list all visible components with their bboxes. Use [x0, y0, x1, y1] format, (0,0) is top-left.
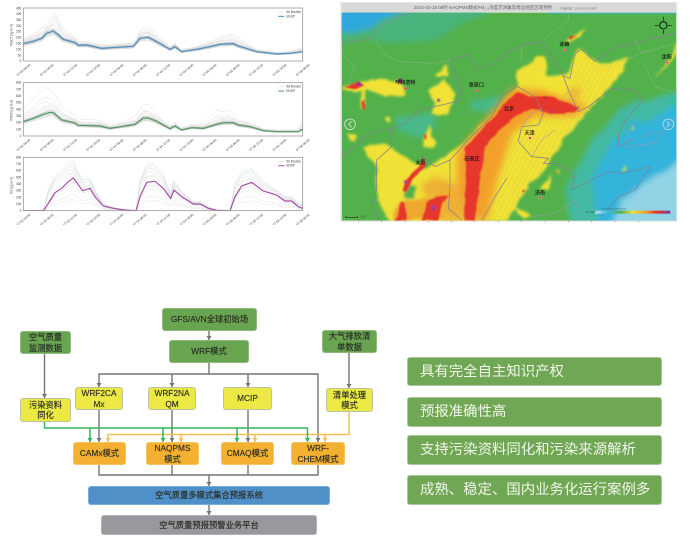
chart: PM2.5: 07-03 00:00	[16, 63, 31, 77]
scale bar: 1:1.8	[360, 217, 366, 219]
flow: global field: GFS/AVN全球初始场	[171, 314, 248, 324]
chart: PM2.5: 150	[16, 42, 22, 46]
chart: PM2.5: 50	[18, 53, 22, 57]
city labels: 呼和浩特	[395, 79, 415, 86]
legend: O3: 58 Models	[286, 159, 301, 163]
chart: O3: 100	[16, 202, 22, 206]
flow: WRF2NAQM: WRF2NA	[154, 388, 190, 398]
flow: NAQPMS: NAQPMS	[155, 443, 190, 453]
chart: PM10: 07-05 12:00	[248, 138, 264, 152]
compass	[655, 17, 672, 34]
chart: PM2.5: PM2.5 [ug m-3]	[10, 24, 14, 46]
flow: assimilation: 同化	[37, 410, 54, 420]
city labels: 北京	[504, 106, 514, 113]
flow: emission data: 单数据	[337, 342, 362, 352]
chart: PM10: 400	[16, 107, 22, 111]
chart: PM10: PM10 [ug m-3]	[10, 100, 14, 121]
chart: PM10: 700	[16, 87, 22, 91]
flow: global field	[162, 308, 257, 331]
chart: PM10: 100	[16, 127, 22, 131]
chart: PM10: 07-03 18:00	[85, 138, 101, 152]
flow: WRF2CAMx: WRF2CA	[81, 388, 117, 398]
map ticks	[358, 221, 638, 222]
flow: emission processing: 清单处理	[333, 390, 366, 400]
chart: PM2.5: 200	[16, 36, 22, 40]
chart: PM10: 07-03 00:00	[16, 138, 31, 152]
green assimilation connectors	[44, 422, 310, 442]
chart: O3	[10, 155, 311, 227]
chart: O3: 0	[20, 209, 22, 213]
chart: PM2.5: 350	[16, 18, 22, 22]
flow: platform: 空气质量预报预警业务平台	[159, 520, 259, 530]
feature: accuracy: 预报准确性高	[420, 404, 506, 420]
colour bar legend: PM₂.₅(μg/m³)	[586, 211, 598, 214]
flow: WRF-CHEM: CHEM模式	[297, 454, 339, 464]
legend: PM2.5: ENSP	[286, 14, 295, 18]
legend: PM10	[278, 85, 301, 93]
chart: PM10: 300	[16, 114, 22, 118]
legend: O3	[278, 159, 301, 168]
chart: O3: 500	[16, 175, 22, 179]
chart: PM2.5: 400	[16, 12, 22, 16]
city labels: 天津	[525, 129, 535, 136]
city labels	[395, 41, 672, 199]
chart: PM2.5: 07-05 00:00	[202, 63, 217, 77]
chart: PM10: 07-05 06:00	[225, 138, 241, 152]
chart: PM2.5: 07-05 06:00	[225, 63, 241, 77]
flow: emission data: 大气排放清	[329, 331, 370, 341]
chart: PM2.5: 250	[16, 30, 22, 34]
chart: PM2.5: 07-05 12:00	[248, 63, 264, 77]
city labels: 石家庄	[464, 155, 480, 162]
flow: WRF2CAMx: Mx	[93, 398, 105, 408]
map title bar	[342, 3, 676, 13]
chart: PM2.5: 07-03 12:00	[62, 63, 78, 77]
chart: PM10: 600	[16, 94, 22, 98]
flow: assimilation: 污染资料	[29, 400, 62, 410]
chart: PM2.5	[10, 6, 311, 77]
chart: PM10	[10, 81, 311, 152]
flow: WRF2NAQM	[148, 387, 196, 410]
chart: PM2.5: 0	[20, 59, 22, 63]
map title bar: 2016-03-16 08时 NAQPMS模式PM₂.₅浓度京津冀及周边地区区域预势	[414, 4, 553, 11]
chart: PM10: 07-06 00:00	[295, 138, 311, 152]
city labels: 沈阳	[662, 53, 672, 60]
colour bar legend	[586, 209, 670, 214]
flow: monitoring data: 监测数据	[29, 342, 62, 352]
feature: IP: 具有完全自主知识产权	[420, 364, 564, 380]
time series charts	[10, 6, 311, 225]
feature: accuracy	[407, 397, 662, 427]
flow: emission data	[322, 330, 377, 353]
flow: CAMx	[73, 442, 126, 465]
chart: PM2.5: 300	[16, 24, 22, 28]
map panel	[340, 2, 678, 222]
flow: monitoring data	[20, 331, 71, 354]
chart: PM10: 07-04 12:00	[155, 138, 171, 152]
legend: O3: ENSP	[286, 164, 295, 168]
orange emission connectors	[106, 412, 349, 442]
flow: WRF-CHEM: WRF-	[307, 443, 329, 453]
flow: CMAQ: CMAQ模式	[227, 448, 268, 458]
flow: platform	[101, 515, 317, 535]
chart: PM2.5: 07-04 06:00	[132, 63, 148, 77]
flow: CMAQ	[221, 442, 274, 465]
feature: IP	[407, 357, 662, 386]
chart: PM10: 07-05 18:00	[272, 138, 287, 152]
chart: PM10: 07-04 00:00	[109, 138, 124, 152]
feature: assimilation: 支持污染资料同化和污染来源解析	[420, 442, 636, 458]
colour bar legend: 35 75 115 150 250 350 500	[602, 209, 627, 211]
chart: PM10: 800	[16, 81, 22, 85]
flow: WRF2NAQM: QM	[165, 398, 179, 408]
flow: ensemble system	[88, 486, 330, 505]
chart: PM10: 500	[16, 101, 22, 105]
flow: monitoring data: 空气质量	[29, 332, 62, 342]
legend: PM10: ENSP	[286, 89, 295, 93]
chart: PM10: 07-04 06:00	[132, 138, 148, 152]
map title bar: （产品时间：2016-03-15 20时）	[558, 7, 599, 11]
chart: O3: 300	[16, 189, 22, 193]
chart: PM10: 07-04 18:00	[179, 138, 194, 152]
chart: PM2.5: 07-04 12:00	[155, 63, 171, 77]
flow: CAMx: CAMx模式	[80, 448, 119, 458]
province borders	[342, 13, 676, 221]
chart: O3: 800	[16, 155, 22, 159]
flow: emission processing	[326, 388, 373, 412]
left arrow	[345, 119, 355, 130]
flow: ensemble system: 空气质量多模式集合预报系统	[155, 490, 263, 500]
chart: PM2.5: 07-04 00:00	[109, 63, 124, 77]
chart: PM2.5: 07-05 18:00	[272, 63, 287, 77]
chart: PM2.5: 07-03 06:00	[39, 63, 55, 77]
concentration field	[342, 12, 676, 221]
city labels: 张家口	[469, 82, 484, 89]
feature: assimilation	[407, 435, 662, 465]
chart: O3: 200	[16, 195, 22, 199]
chart: O3: 400	[16, 182, 22, 186]
chart: PM10: 07-03 06:00	[39, 138, 55, 152]
legend: PM2.5	[278, 10, 301, 18]
chart: PM2.5: 07-06 00:00	[295, 63, 311, 77]
flow: WRF: WRF模式	[191, 346, 227, 356]
grey model connectors	[44, 331, 349, 515]
flow: NAQPMS	[146, 442, 199, 465]
feature: maturity: 成熟、稳定、国内业务化运行案例多	[420, 482, 650, 498]
chart: PM10: 0	[20, 134, 22, 138]
chart: PM2.5: 07-03 18:00	[85, 63, 101, 77]
flow: WRF2CAMx	[75, 387, 123, 410]
city labels: 赤峰	[560, 41, 570, 48]
chart: PM2.5: 450	[16, 6, 22, 10]
chart: PM10: 07-03 12:00	[62, 138, 78, 152]
flow: MCIP: MCIP	[237, 393, 258, 403]
city labels: 太原	[415, 159, 425, 166]
chart: PM10: 07-05 00:00	[202, 138, 217, 152]
scale bar	[346, 216, 366, 219]
legend: PM2.5: 58 Models	[286, 10, 301, 14]
chart: PM10: 200	[16, 121, 22, 125]
city labels: 济南	[535, 189, 545, 196]
chart: O3: 600	[16, 169, 22, 173]
flow: WRF-CHEM	[291, 442, 345, 465]
grey arrowheads	[42, 336, 352, 515]
flow: emission processing: 模式	[341, 400, 358, 410]
chart: PM2.5: 07-04 18:00	[179, 63, 194, 77]
feature: maturity	[407, 475, 662, 505]
flow: NAQPMS: 模式	[164, 454, 181, 464]
chart: O3: O3 [ug m-3]	[10, 177, 14, 194]
legend: PM10: 58 Models	[286, 85, 301, 89]
flow: WRF	[169, 340, 249, 363]
right arrow	[663, 119, 674, 130]
flow: MCIP	[223, 387, 272, 410]
flowchart connectors	[42, 331, 352, 515]
flow: assimilation	[20, 398, 71, 422]
chart: O3: 700	[16, 162, 22, 166]
chart: PM2.5: 100	[16, 47, 22, 51]
